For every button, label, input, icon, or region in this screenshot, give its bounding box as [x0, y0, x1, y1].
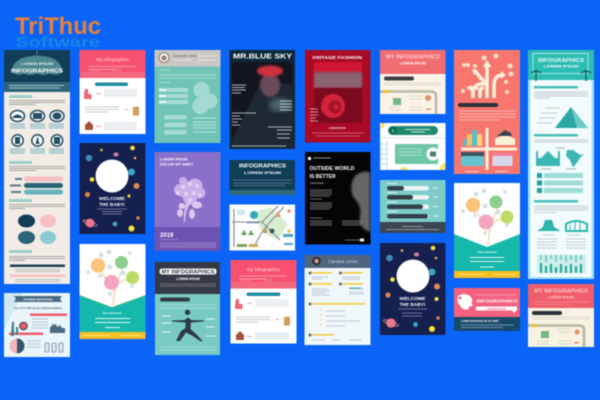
panel: coral My Infographics road copy — [528, 284, 594, 347]
panel: coral My Infographics road copy: MY INFOGRAPHICS — [534, 288, 589, 294]
panel: pink My Infographics card copy: My Infographics — [247, 267, 280, 272]
panel: pink and navy infographics banner: LOREM IPSUM — [486, 307, 507, 311]
panel: infographics lorem ipsum banner — [230, 160, 295, 195]
panel: welcome the baby card copy: WELCOME — [400, 296, 426, 301]
panel: data infographic bottom left — [4, 293, 70, 357]
panel: green list infographic — [380, 123, 446, 170]
logo: Software — [15, 34, 100, 51]
panel: Mr Blue Sky magazine: MR.BLUE SKY — [233, 52, 292, 60]
panel: pink and navy infographics banner: INFOGRAPHICS — [476, 298, 518, 304]
panel: pink My Infographics card: My Infographics — [96, 57, 129, 62]
panel: outside world poster: OUTSIDE WORLD — [310, 166, 355, 172]
icon: hydrangea flower — [174, 177, 206, 222]
panel: teal profile card — [154, 50, 220, 143]
panel: welcome the baby card: THE BABY! — [99, 202, 125, 207]
panel: welcome the baby card: WELCOME — [99, 196, 125, 201]
icon: paint palette — [457, 294, 472, 310]
panel: infographics lorem ipsum banner: INFOGRAPHICS — [239, 164, 287, 170]
panel: outside world poster: IS BETTER — [310, 174, 336, 180]
panel: long infographic lorem ipsum — [4, 50, 70, 284]
panel: purple flower poster: LOREM IPSUM — [160, 156, 187, 162]
panel: data infographic bottom left: Up to 12 of 100 use up 1,000 prescriptions — [14, 307, 63, 310]
panel: coral My Infographics road — [380, 50, 446, 114]
panel: purple flower poster: 2019 — [160, 233, 174, 239]
panel: tall teal infographic: LOREM IPSUM — [544, 64, 579, 68]
icon: road arrows — [466, 60, 506, 98]
bar chart — [537, 255, 586, 273]
panel: Caroline Jones resume — [304, 255, 370, 345]
panel: Caroline Jones resume: Caroline Jones — [328, 259, 359, 264]
panel: purple flower poster: DOLOR SIT AMET — [160, 162, 194, 166]
panel: tall teal infographic — [528, 50, 594, 279]
panel: dark and teal yoga infographic: LOREM IPSUM — [176, 277, 200, 281]
panel: coral transport infographic — [454, 50, 520, 174]
icon: pyramid and colosseum — [537, 220, 561, 231]
bubbles — [18, 214, 56, 244]
icon: taj mahal and india — [536, 150, 560, 166]
panel: pink and navy infographics banner — [454, 288, 520, 331]
panel: infographics lorem ipsum banner: LOREM IPSUM — [244, 170, 282, 175]
icons: six circles — [10, 110, 64, 146]
panel: welcome the baby card copy — [380, 243, 446, 335]
panel: outside world poster: Grand Pixels — [310, 182, 324, 185]
panel: vintage fashion magazine: VINTAGE FASHION — [312, 55, 363, 61]
panel: horizontal bars infographic — [380, 180, 446, 233]
panel: coral My Infographics road: LOREM IPSUM — [400, 62, 426, 66]
panel: pink and navy infographics banner: LOREM IPSUM DOLOR SIT AMET — [461, 320, 499, 323]
panel: tree card copy — [454, 183, 520, 278]
panel: dark and teal yoga infographic: MY INFOGRAPHICS — [162, 270, 215, 276]
panel: tree card: Your text here! — [102, 311, 122, 315]
panel: coral My Infographics road copy: LOREM IPSUM — [548, 296, 574, 300]
panel: city map: SHOPPING — [247, 222, 259, 224]
panel: city map — [230, 204, 295, 250]
icon: yoga figure — [172, 310, 204, 342]
panel: tall teal infographic: INFOGRAPHICS — [538, 58, 584, 64]
panel: vintage fashion magazine: LOREM IPSUM — [329, 127, 345, 130]
logo: TriThuc — [15, 13, 101, 40]
icon: pyramid — [555, 107, 588, 128]
panel: purple flower poster — [154, 152, 220, 251]
panel: dark and teal yoga infographic — [155, 262, 220, 355]
panel: coral My Infographics road: MY INFOGRAPHICS — [386, 54, 441, 60]
panel: Mr Blue Sky magazine — [230, 50, 295, 149]
panel: tree card copy: Your text here! — [477, 250, 497, 254]
panel: teal profile card: HANA MY LARA — [174, 54, 197, 58]
panel: pink My Infographics card copy — [230, 260, 296, 344]
panel: green list infographic: 1 — [392, 128, 395, 133]
panel: pink My Infographics card — [80, 50, 146, 134]
panel: data infographic bottom left: PHARMA INITIATIVES — [24, 298, 53, 302]
panel: tree card — [80, 244, 146, 339]
panel: long infographic lorem ipsum: LOREM IPSUM — [21, 61, 54, 66]
panel: outside world poster — [305, 152, 370, 244]
panel: welcome the baby card — [80, 143, 146, 234]
panel: long infographic lorem ipsum: INFOGRAPHICS — [11, 68, 63, 74]
panel: welcome the baby card copy: THE BABY! — [400, 302, 426, 307]
panel: vintage fashion magazine — [305, 50, 370, 142]
